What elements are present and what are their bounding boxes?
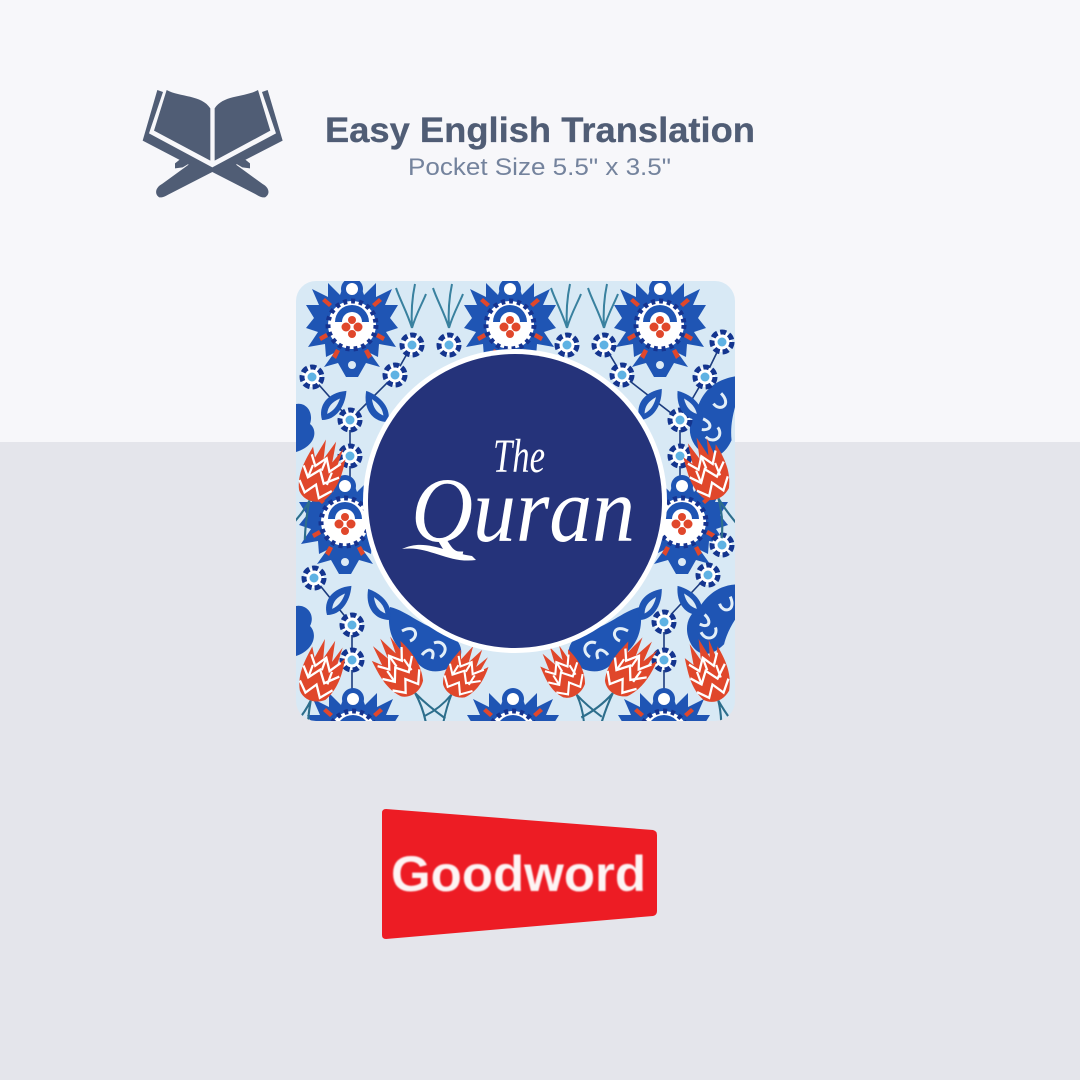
tile pattern <box>296 281 735 721</box>
cover title: Quran: Quran <box>411 459 635 561</box>
cover title: The: The <box>493 430 545 483</box>
title medallion <box>363 349 667 653</box>
publisher logo <box>382 809 657 939</box>
book cover <box>296 281 735 721</box>
icon: open book on stand <box>143 90 283 197</box>
subheading: Pocket Size 5.5" x 3.5" <box>408 154 671 181</box>
publisher name: Goodword <box>391 846 646 902</box>
heading: Easy English Translation <box>325 110 755 150</box>
title swash <box>402 545 476 561</box>
